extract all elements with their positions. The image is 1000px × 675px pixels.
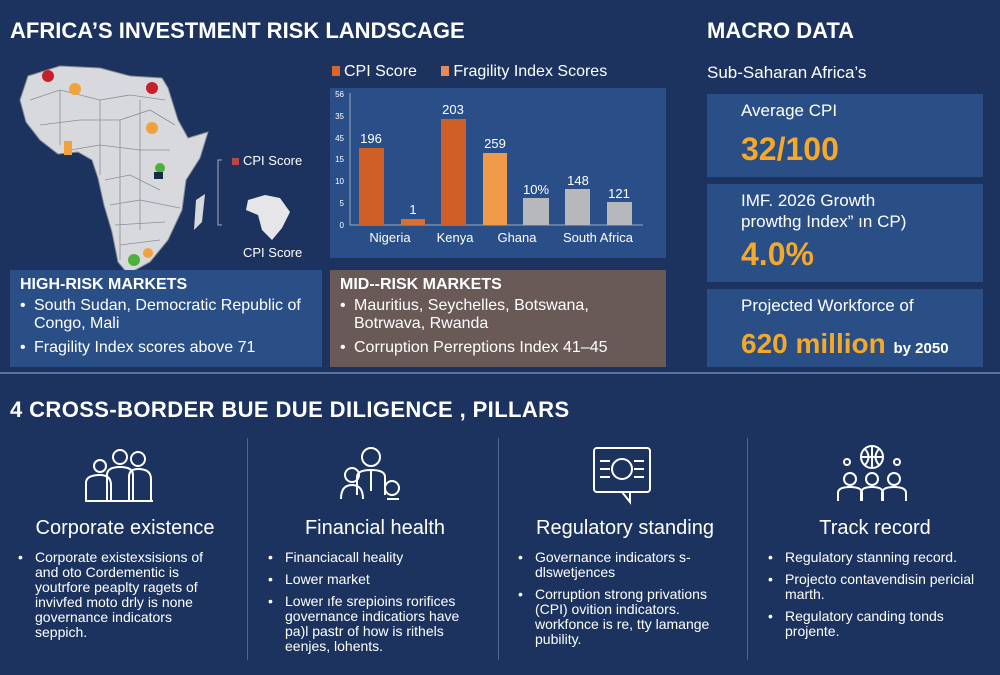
pillar: track record: Projecto contavendisin pericial marth.	[785, 571, 974, 602]
pillar: financial health: Lower ıfe srepioins rorifices governance indicatiors have pa)l pastr of how is rithels eenjes, lohents.	[285, 593, 459, 654]
section title: 4 CROSS-BORDER BUE DUE DILIGENCE , PILLARS	[10, 397, 570, 422]
pillar: track record: Regulatory stanning record.	[785, 549, 957, 565]
pillar: corporate existence: Corporate existence	[36, 517, 214, 539]
macro card: CPI: Average CPI	[741, 101, 837, 120]
pillar: track record: Track record	[819, 517, 931, 539]
pillar: track record	[768, 445, 974, 639]
bar chart: 10%	[523, 182, 549, 197]
bar chart: 0	[340, 221, 345, 230]
pillar: financial health: Financiacall heality	[285, 549, 403, 565]
macro card: workforce: 620 million by 2050	[741, 328, 949, 359]
bar chart: Nigeria	[369, 230, 411, 245]
panel: mid-risk markets	[330, 270, 666, 367]
macro card: growth	[707, 184, 983, 282]
bar chart: 203	[442, 102, 464, 117]
icon: businessman	[340, 447, 400, 500]
macro card: CPI	[707, 94, 983, 177]
bar chart: South Africa	[563, 230, 634, 245]
pillar: track record: Regulatory canding tonds projente.	[785, 608, 944, 639]
bar chart: 148	[567, 173, 589, 188]
panel: high-risk markets	[10, 270, 322, 367]
bar chart: 10	[335, 177, 345, 186]
small map label: CPI Score	[243, 245, 302, 260]
macro card: workforce	[707, 289, 983, 367]
pillar: regulatory standing: Regulatory standing	[536, 517, 714, 539]
macro heading: MACRO DATA	[707, 18, 854, 43]
pillar: financial health	[268, 447, 459, 654]
pillar: corporate existence: Corporate existexsisions of and oto Cordementic is youtrfore peaplty ragets of invivfed moto drly is none governance indicators seppich.	[35, 549, 203, 640]
bar chart: 45	[335, 134, 345, 143]
bar chart: 15	[335, 155, 345, 164]
panel: high-risk markets: South Sudan, Democratic Republic of Congo, Mali	[34, 297, 301, 332]
bar chart: 35	[335, 112, 345, 121]
bar chart: Ghana	[497, 230, 537, 245]
legend: CPI score: CPI Score	[243, 153, 302, 168]
macro card: growth: 4.0%	[741, 236, 814, 272]
pillar: corporate existence	[18, 449, 214, 640]
pillar: regulatory standing	[518, 447, 714, 647]
macro card: workforce: Projected Workforce of	[741, 296, 914, 315]
pillar: regulatory standing: Governance indicators s-dlswetjences	[535, 549, 691, 580]
bar chart: 56	[335, 90, 345, 99]
bar chart: 121	[608, 186, 630, 201]
bar chart: 5	[340, 199, 345, 208]
bar chart: Kenya	[437, 230, 474, 245]
icon: document bubble	[593, 447, 651, 505]
bar chart: 196	[360, 131, 382, 146]
bar chart	[330, 88, 666, 258]
macro subheading: Sub-Saharan Africa’s	[707, 63, 866, 82]
macro card: CPI: 32/100	[741, 131, 839, 167]
panel: mid-risk markets: MID--RISK MARKETS	[340, 276, 502, 293]
pillar: financial health: Financial health	[305, 517, 445, 539]
icon: people	[85, 449, 153, 502]
chart legend: CPI Score Fragility Index Scores	[344, 63, 607, 80]
panel: mid-risk markets: Corruption Perreptions Index 41–45	[354, 339, 608, 356]
panel: mid-risk markets: Mauritius, Seychelles, Botswana, Botrwava, Rwanda	[354, 297, 589, 332]
pillar: financial health: Lower market	[285, 571, 370, 587]
bar chart: 1	[409, 202, 417, 217]
icon: globe people	[837, 445, 907, 501]
panel: high-risk markets: HIGH-RISK MARKETS	[20, 276, 187, 293]
panel: high-risk markets: Fragility Index scores above 71	[34, 339, 255, 356]
macro card: growth: prowthg Index” ın CP)	[741, 212, 906, 231]
title: AFRICA’S INVESTMENT RISK LANDSCAGE	[10, 18, 465, 43]
map of africa	[20, 66, 290, 270]
bar chart: 259	[484, 136, 506, 151]
macro card: growth: IMF. 2026 Growth	[741, 191, 875, 210]
pillar: regulatory standing: Corruption strong privations (CPI) ovition indicators. workfonce is re, tty lamange pubility.	[535, 586, 709, 647]
